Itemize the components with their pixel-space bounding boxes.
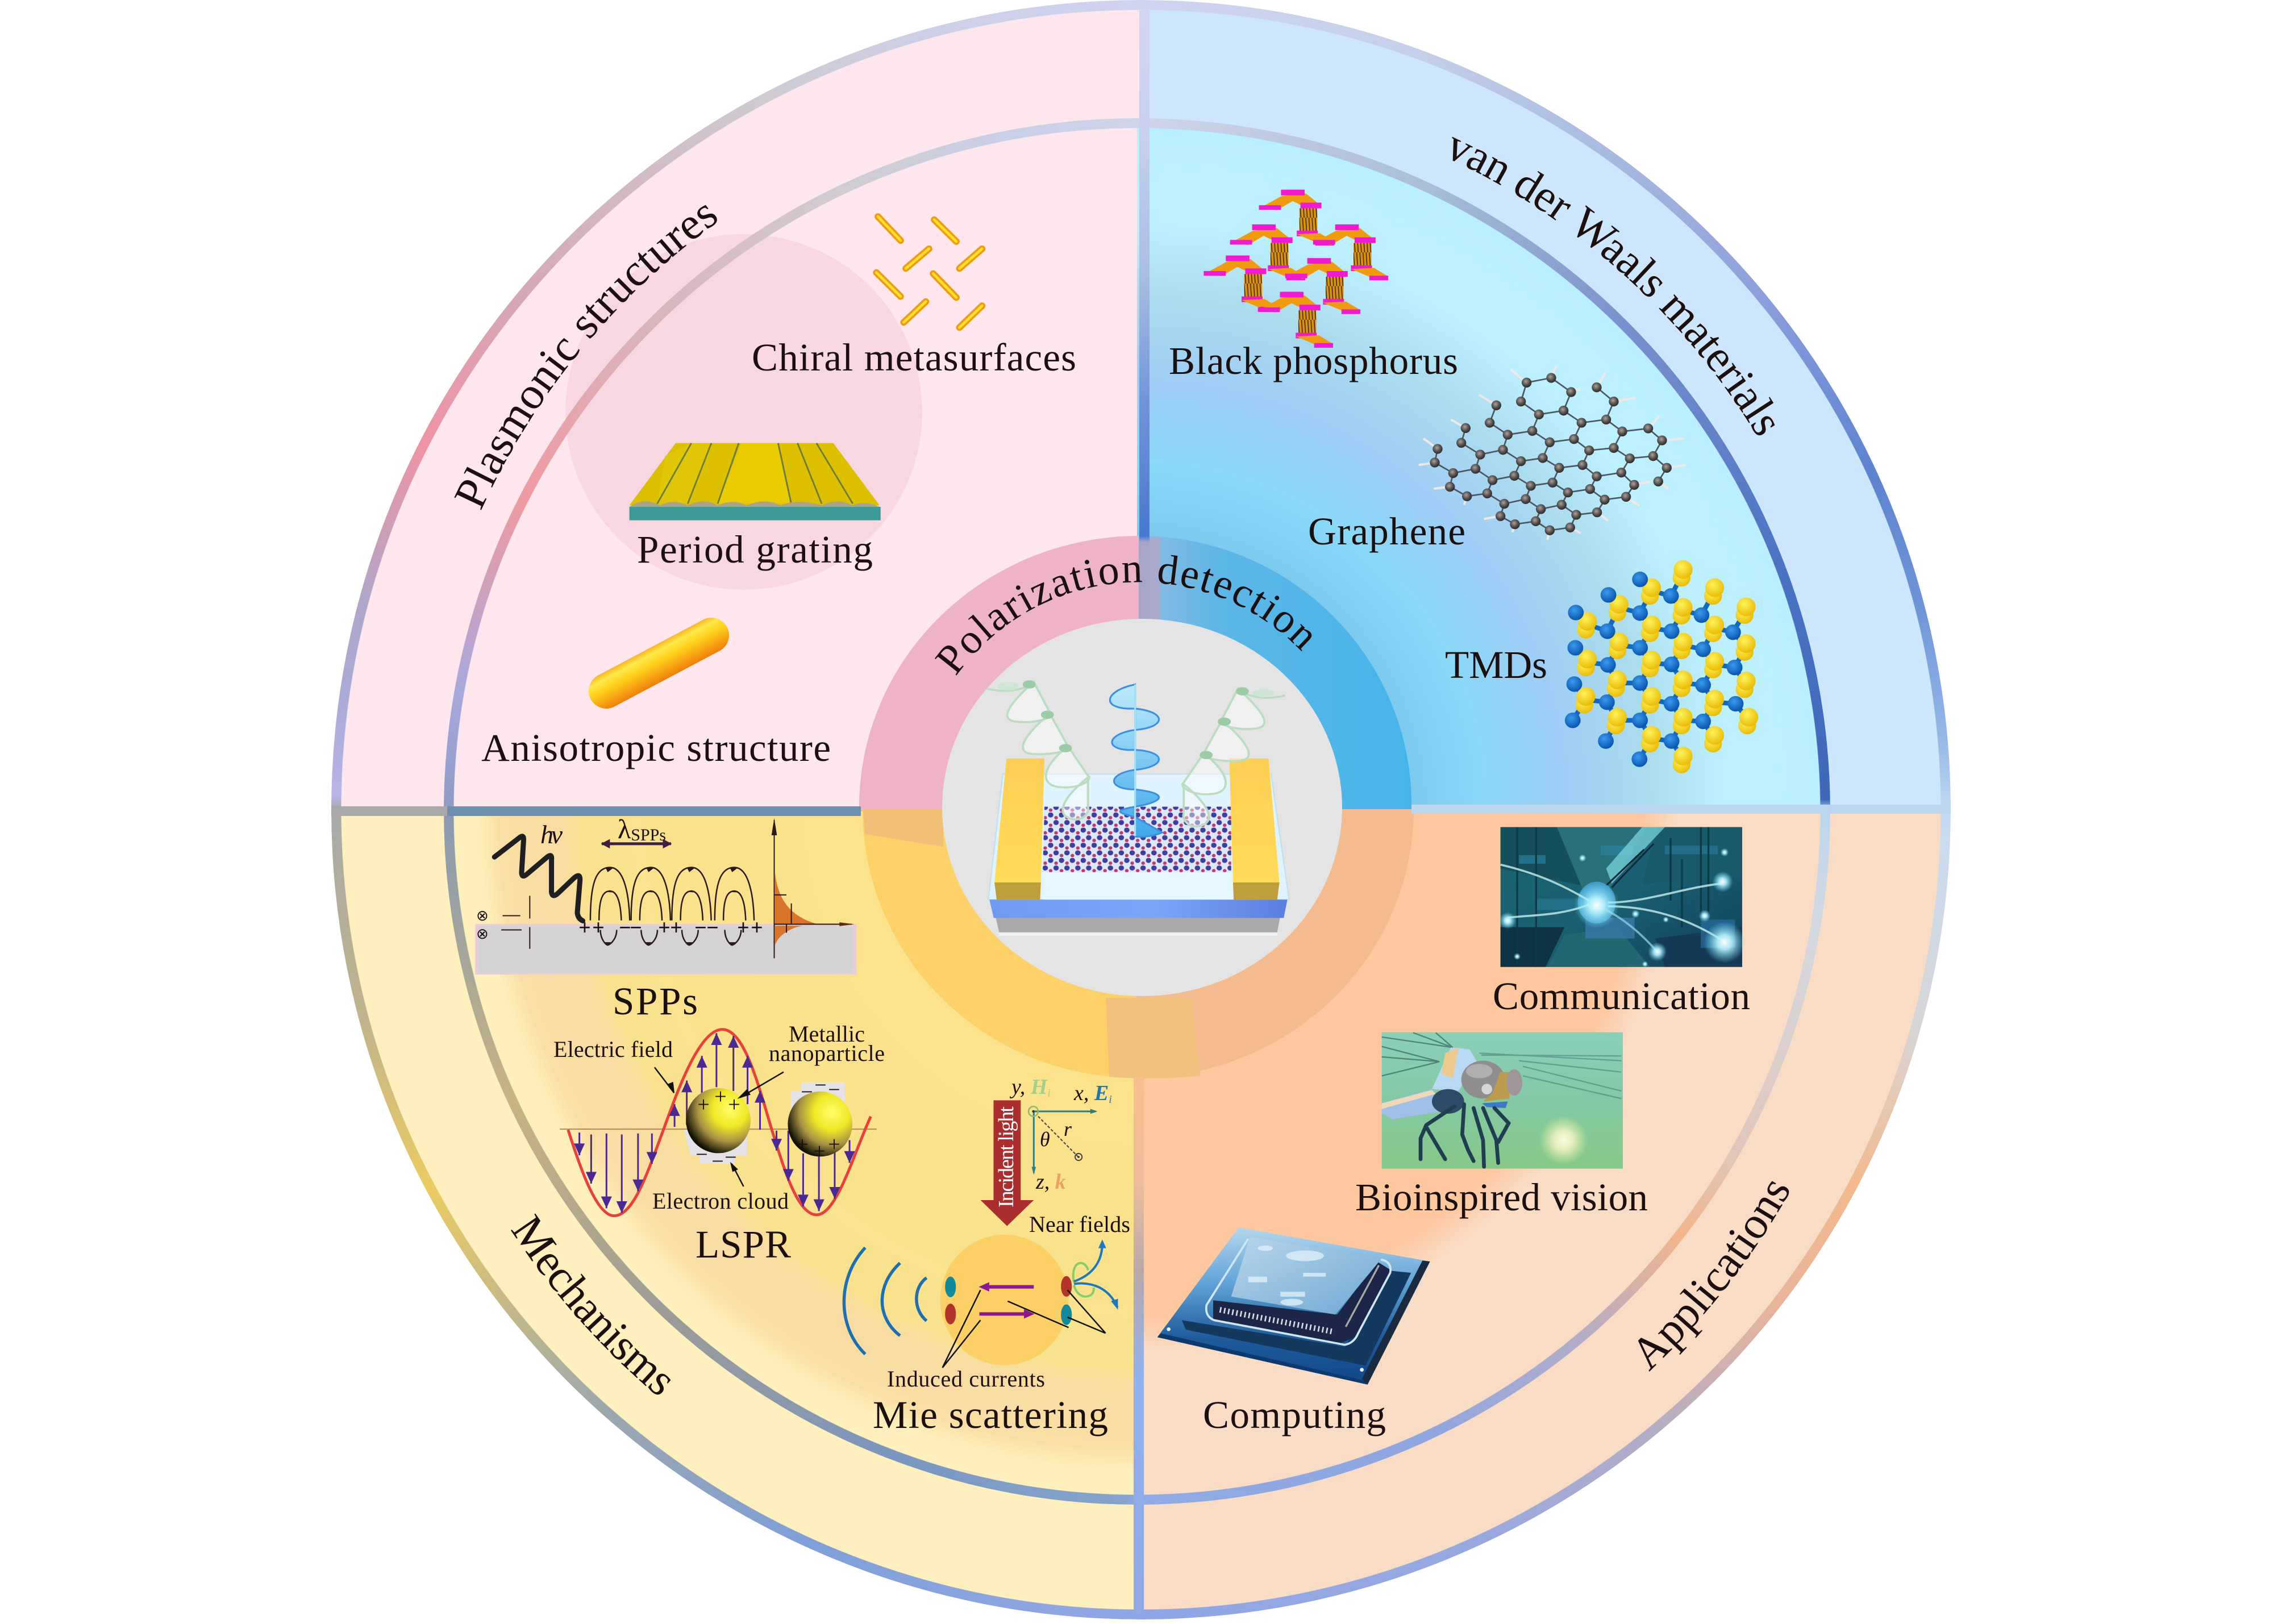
charges on nanoparticles: − bbox=[828, 1078, 840, 1102]
image: computing chip bbox=[1157, 1227, 1430, 1385]
icon: chiral metasurface rods bbox=[876, 216, 982, 327]
panel: plasmonic inner sector bbox=[445, 119, 1140, 811]
outer gradient ring bbox=[331, 0, 1951, 1619]
surface charges: + bbox=[670, 916, 682, 940]
center ring seam bottom bbox=[1106, 998, 1200, 1078]
label: Chiral metasurfaces: Chiral metasurfaces bbox=[752, 336, 1076, 379]
panel: van der Waals materials outer band bbox=[1141, 4, 1947, 810]
heading: Applications: Applications bbox=[1638, 1181, 1789, 1372]
center ring: orange quadrant bbox=[1136, 809, 1414, 1078]
panel: mechanisms outer band bbox=[335, 810, 1141, 1615]
label: Computing: Computing bbox=[1203, 1393, 1386, 1436]
surface charges: − bbox=[694, 916, 707, 940]
icon: period grating bbox=[630, 443, 881, 520]
label: Induced currents: Induced currents bbox=[887, 1366, 1045, 1392]
center ring seam top bbox=[1139, 537, 1160, 622]
surface charges: + bbox=[737, 916, 749, 940]
surface charges: − bbox=[706, 916, 719, 940]
charges on nanoparticles: + bbox=[828, 1132, 840, 1156]
highlight spot behind grating bbox=[565, 234, 922, 590]
label: y axis: y, H bbox=[1011, 1075, 1047, 1099]
surface charges: − bbox=[619, 916, 631, 940]
label: Near fields: Near fields bbox=[1029, 1211, 1130, 1237]
label: Communication: Communication bbox=[1493, 975, 1750, 1018]
label: h nu: hν bbox=[540, 820, 563, 849]
heading: Mechanisms: Mechanisms bbox=[511, 1214, 671, 1394]
charges on nanoparticles: + bbox=[714, 1085, 727, 1109]
label: nanoparticle: nanoparticle bbox=[769, 1040, 885, 1066]
icon: central polarization photodetector device bbox=[986, 680, 1289, 936]
label: z axis: z, k bbox=[1035, 1170, 1066, 1194]
surface charges bbox=[578, 916, 763, 940]
surface charges: + bbox=[658, 916, 671, 940]
label: lambda SPPs: λ bbox=[618, 814, 631, 844]
image: bioinspired dragonfly bbox=[1382, 1032, 1623, 1169]
panel: plasmonic structures outer band bbox=[335, 4, 1141, 810]
label: TMDs: TMDs bbox=[1445, 643, 1547, 686]
center ring seam left bbox=[863, 809, 943, 847]
panel: applications outer band bbox=[1141, 810, 1947, 1615]
label: Graphene: Graphene bbox=[1308, 510, 1465, 553]
symbols: field into plane: ⊗ bbox=[476, 926, 489, 943]
surface charges: + bbox=[751, 916, 763, 940]
label: Period grating: Period grating bbox=[637, 528, 873, 571]
label: lambda SPPs: SPPs bbox=[631, 826, 666, 844]
label: y axis: i bbox=[1047, 1087, 1051, 1100]
label: x axis: i bbox=[1109, 1093, 1112, 1106]
icon: black phosphorus lattice bbox=[1204, 190, 1389, 348]
heading: Plasmonic structures: Plasmonic structures bbox=[454, 205, 717, 510]
surface charges: + bbox=[592, 916, 605, 940]
illustration: localized surface plasmon resonance bbox=[560, 1030, 877, 1216]
charges on nanoparticles: − bbox=[711, 1150, 724, 1173]
illustration: surface plasmon polaritons bbox=[477, 818, 855, 973]
label: Incident light: Incident light bbox=[994, 1106, 1018, 1207]
label: Mie scattering: Mie scattering bbox=[873, 1393, 1108, 1436]
label: x axis: x, E bbox=[1074, 1081, 1109, 1105]
inner gradient ring bbox=[444, 118, 1830, 1505]
label: r: r bbox=[1064, 1118, 1072, 1140]
panel: mechanisms inner sector bbox=[445, 811, 1137, 1504]
center ring: blue quadrant bbox=[1139, 536, 1411, 809]
icon: graphene lattice bbox=[1419, 365, 1686, 540]
label: Bioinspired vision: Bioinspired vision bbox=[1355, 1176, 1648, 1219]
heading: van der Waals materials: van der Waals materials bbox=[1452, 136, 1775, 435]
charges on nanoparticles: − bbox=[696, 1143, 708, 1167]
label: SPPs: SPPs bbox=[613, 980, 698, 1023]
label: Electron cloud: Electron cloud bbox=[652, 1188, 789, 1214]
illustration: Mie scattering bbox=[844, 1100, 1118, 1368]
charges on nanoparticles: − bbox=[724, 1146, 737, 1169]
charges on nanoparticles: + bbox=[813, 1139, 826, 1163]
dividers bbox=[331, 10, 1951, 1613]
center gray disc bbox=[942, 619, 1342, 996]
surface charges: + bbox=[578, 916, 591, 940]
center ring: pink quadrant bbox=[859, 536, 1140, 811]
charges on nanoparticles: + bbox=[697, 1093, 710, 1117]
symbols: field out of plane: ⊗ bbox=[476, 907, 489, 925]
image: communication data centre bbox=[1499, 827, 1746, 967]
label: Metallic: Metallic bbox=[789, 1021, 865, 1047]
label: Anisotropic structure: Anisotropic structure bbox=[481, 726, 831, 769]
label: theta: θ bbox=[1040, 1128, 1050, 1151]
label: LSPR: LSPR bbox=[696, 1223, 791, 1266]
surface charges: − bbox=[630, 916, 642, 940]
center ring: yellow quadrant bbox=[863, 809, 1136, 1078]
icon: anisotropic gold nanorod bbox=[606, 635, 711, 691]
charges on nanoparticles: − bbox=[801, 1080, 813, 1104]
panel: applications inner sector bbox=[1137, 811, 1829, 1504]
label: Electric field: Electric field bbox=[553, 1036, 673, 1062]
charges on nanoparticles: + bbox=[796, 1132, 809, 1156]
charges on nanoparticles: − bbox=[814, 1073, 827, 1097]
label: Black phosphorus: Black phosphorus bbox=[1169, 339, 1458, 382]
charges on nanoparticles: + bbox=[728, 1093, 740, 1117]
icon: TMD lattice bbox=[1565, 560, 1758, 773]
charges on nanoparticles bbox=[696, 1073, 840, 1173]
panel: van der Waals inner sector bbox=[1137, 119, 1829, 811]
title: Polarization detection: Polarization detection bbox=[934, 555, 1311, 676]
